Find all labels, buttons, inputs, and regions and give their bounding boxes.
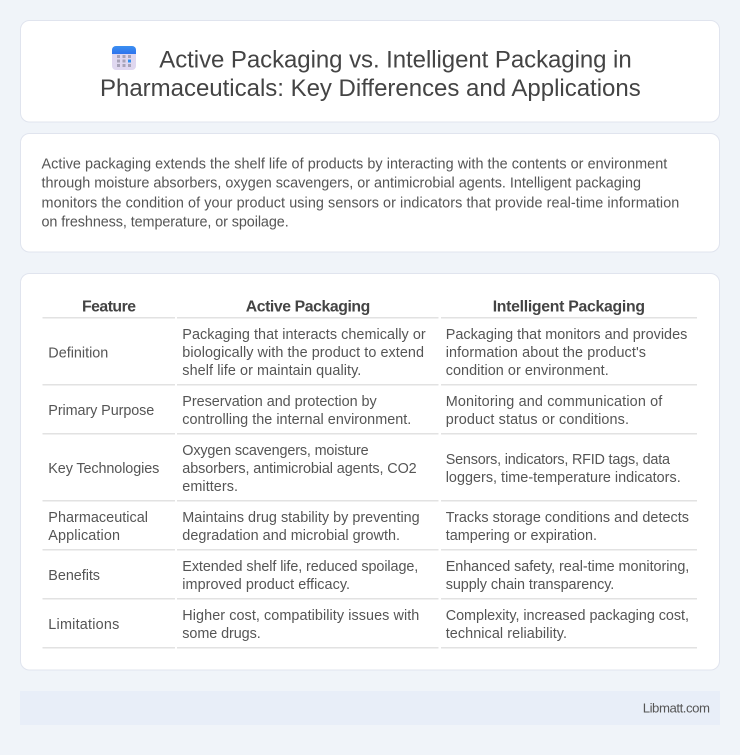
row: definition: shelf life or maintain quality.	[182, 363, 361, 379]
row: primary purpose	[48, 394, 663, 428]
row: pharmaceutical application: degradation and microbial growth.	[182, 528, 400, 544]
row: definition	[48, 327, 687, 379]
row: definition: condition or environment.	[446, 363, 609, 379]
table header row: Active Packaging	[246, 299, 370, 316]
row: benefits: Extended shelf life, reduced spoilage,	[182, 559, 418, 575]
row: key technologies	[48, 443, 681, 495]
text block: introduction: Active packaging extends the shelf life of products by interacting with the contents or environment	[42, 156, 667, 172]
row: primary purpose: Monitoring and communication of	[446, 394, 663, 410]
row: key technologies: Sensors, indicators, RFID tags, data	[446, 452, 670, 468]
footer bar	[20, 691, 720, 725]
row: limitations: Limitations	[48, 617, 119, 633]
row: definition: Packaging that monitors and provides	[446, 327, 687, 343]
row: limitations: Higher cost, compatibility issues with	[182, 608, 419, 624]
row: key technologies: Oxygen scavengers, moisture	[182, 443, 369, 459]
row: limitations: technical reliability.	[446, 626, 567, 642]
footer text: source: Libmatt.com	[643, 700, 710, 715]
row: limitations	[48, 608, 689, 642]
title: Active Packaging vs. Intelligent Packaging in	[159, 46, 632, 73]
panel: comparison table	[20, 274, 720, 670]
row: benefits: Enhanced safety, real-time monitoring,	[446, 559, 689, 575]
text block: introduction	[42, 156, 679, 230]
text block: introduction: on freshness, temperature, or spoilage.	[42, 214, 289, 230]
row: limitations: some drugs.	[182, 626, 261, 642]
row: key technologies: absorbers, antimicrobial agents, CO2	[182, 461, 417, 477]
icon: calendar	[112, 46, 136, 70]
row: definition: biologically with the product to extend	[182, 345, 424, 361]
row: primary purpose: Preservation and protection by	[182, 394, 377, 410]
row: key technologies: Key Technologies	[48, 461, 159, 477]
row: pharmaceutical application: Application	[48, 528, 120, 544]
row: benefits: improved product efficacy.	[182, 577, 350, 593]
row: benefits: Benefits	[48, 568, 100, 584]
row: definition: Packaging that interacts chemically or	[182, 327, 426, 343]
row: key technologies: emitters.	[182, 479, 238, 495]
row: pharmaceutical application: Pharmaceutical	[48, 510, 148, 526]
row: key technologies: loggers, time-temperature indicators.	[446, 470, 681, 486]
row: definition: Definition	[48, 345, 108, 361]
row: pharmaceutical application: Tracks storage conditions and detects	[446, 510, 689, 526]
table header row: Intelligent Packaging	[493, 299, 645, 316]
row: pharmaceutical application: tampering or expiration.	[446, 528, 597, 544]
table header row: Feature	[82, 299, 136, 316]
row: benefits	[48, 559, 689, 593]
row: pharmaceutical application: Maintains drug stability by preventing	[182, 510, 420, 526]
title	[100, 46, 641, 102]
text block: introduction: through moisture absorbers, oxygen scavengers, or antimicrobial agents. Intelligent packaging	[42, 175, 641, 191]
row: primary purpose: Primary Purpose	[48, 403, 154, 419]
row: primary purpose: product status or conditions.	[446, 412, 629, 428]
title: Pharmaceuticals: Key Differences and Applications	[100, 75, 641, 102]
row: pharmaceutical application	[48, 510, 689, 544]
table header row	[82, 299, 645, 316]
row: primary purpose: controlling the internal environment.	[182, 412, 411, 428]
row: definition: information about the product's	[446, 345, 646, 361]
row: benefits: supply chain transparency.	[446, 577, 614, 593]
panel: title card	[20, 20, 720, 122]
row: limitations: Complexity, increased packaging cost,	[446, 608, 689, 624]
panel: intro text card	[20, 134, 720, 252]
text block: introduction: monitors the condition of your product using sensors or indicators that provide real-time information	[42, 195, 679, 211]
